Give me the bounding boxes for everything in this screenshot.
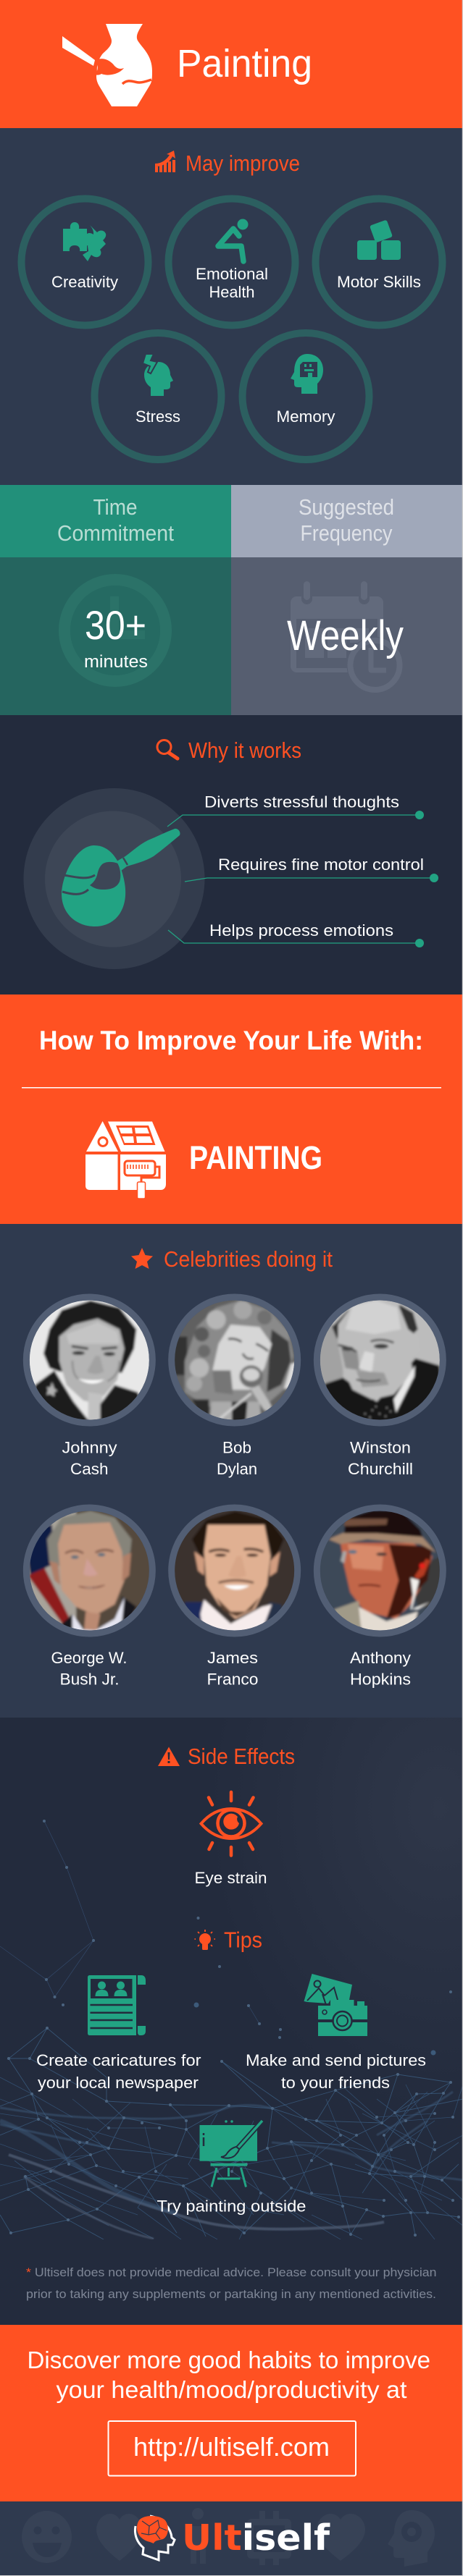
callout: helps process emotions xyxy=(168,921,424,947)
text: discover more: Discover more good habits to improve xyxy=(28,2347,430,2373)
label: Johnny Cash: Cash xyxy=(70,1460,109,1478)
icon: painted vase xyxy=(62,24,152,106)
benefit: stress: Stress xyxy=(135,407,180,426)
heading: suggested frequency xyxy=(299,494,394,546)
illustration: brush painting egg xyxy=(23,788,204,969)
panel: time commitment xyxy=(0,485,231,715)
label: Johnny Cash: Johnny xyxy=(62,1439,117,1456)
benefit: creativity xyxy=(22,198,148,326)
heading: tips xyxy=(194,1927,262,1953)
icon: blocks xyxy=(357,219,401,260)
benefit: stress xyxy=(94,333,222,460)
callout: diverts stressful thoughts xyxy=(167,793,424,827)
label: James Franco: James xyxy=(207,1649,258,1667)
header panel xyxy=(0,0,463,128)
tip: painting outside xyxy=(157,2121,306,2215)
benefit: emotional health: Health xyxy=(209,283,255,301)
icon: puzzle pieces xyxy=(63,222,106,261)
text: discover more xyxy=(28,2347,430,2403)
heading: celebrities doing it: Celebrities doing it xyxy=(164,1246,333,1272)
panel: call to action xyxy=(0,2325,463,2501)
tip: send pictures: Make and send pictures xyxy=(246,2051,426,2069)
callout: requires fine motor control: Requires fine motor control xyxy=(218,856,424,874)
label: George W. Bush Jr.: Bush Jr. xyxy=(59,1671,119,1688)
panel: may improve xyxy=(0,128,463,485)
heading: time commitment: Commitment xyxy=(57,520,174,546)
benefit: memory: Memory xyxy=(277,407,335,426)
panel: celebrities xyxy=(0,1224,463,1718)
label: Anthony Hopkins: Anthony xyxy=(350,1649,411,1667)
value: 30+ minutes xyxy=(84,602,148,672)
icon: camera with picture xyxy=(304,1974,367,2036)
disclaimer: * Ultiself does not provide medical advice. Please consult your physician xyxy=(26,2265,437,2279)
panel: footer xyxy=(0,2501,463,2576)
label: George W. Bush Jr.: George W. xyxy=(51,1649,128,1667)
icon: house with paint roller xyxy=(85,1121,166,1199)
benefit: emotional health xyxy=(168,198,296,326)
icon: newspaper xyxy=(88,1975,146,2035)
portrait: George W. Bush Jr. xyxy=(23,1503,156,1638)
benefit: emotional health: Emotional xyxy=(196,265,268,283)
callout: helps process emotions: Helps process emotions xyxy=(209,921,393,939)
value: 30+ minutes: minutes xyxy=(84,652,148,672)
title: Painting xyxy=(177,42,312,85)
tip: painting outside: Try painting outside xyxy=(157,2197,306,2215)
value: weekly: Weekly xyxy=(287,612,404,659)
benefit: motor skills: Motor Skills xyxy=(337,273,421,291)
label: Bob Dylan: Dylan xyxy=(217,1460,257,1478)
callout: diverts stressful thoughts: Diverts stressful thoughts xyxy=(204,793,399,811)
tip: send pictures: to your friends xyxy=(281,2074,390,2092)
label: Bob Dylan: Bob xyxy=(222,1439,251,1456)
panel: why it works xyxy=(0,715,463,994)
callout: requires fine motor control xyxy=(185,856,438,882)
label: Winston Churchill: Winston xyxy=(350,1439,411,1456)
icon: easel xyxy=(200,2121,262,2187)
tip: caricatures xyxy=(36,1975,201,2092)
heading: side effects: Side Effects xyxy=(188,1744,295,1769)
text: discover more: your health/mood/productivity at xyxy=(57,2376,407,2403)
benefit: motor skills xyxy=(316,198,442,326)
disclaimer xyxy=(26,2265,437,2301)
icon: clock xyxy=(64,580,166,681)
benefit: creativity: Creativity xyxy=(51,273,118,291)
heading: suggested frequency: Frequency xyxy=(300,520,393,546)
panel: how to improve xyxy=(0,994,463,1224)
tip: send pictures xyxy=(246,1974,426,2092)
panel: suggested frequency xyxy=(231,485,463,715)
portrait: Bob Dylan xyxy=(168,1293,301,1428)
button: url: http://ultiself.com xyxy=(133,2432,330,2462)
portrait: James Franco xyxy=(168,1503,301,1638)
portrait: Johnny Cash xyxy=(23,1293,156,1428)
label: Anthony Hopkins xyxy=(350,1649,411,1688)
label: Bob Dylan xyxy=(217,1439,257,1478)
logo: Ultiself xyxy=(135,2516,330,2560)
disclaimer: prior to taking any supplements or partaking in any mentioned activities. xyxy=(26,2287,436,2301)
heading: why it works: Why it works xyxy=(188,738,301,763)
heading: time commitment xyxy=(57,494,174,546)
label: James Franco: Franco xyxy=(207,1671,258,1688)
heading: suggested frequency: Suggested xyxy=(299,494,394,520)
portrait: Anthony Hopkins xyxy=(314,1503,447,1641)
label: George W. Bush Jr. xyxy=(51,1649,128,1688)
value: 30+ minutes: 30+ xyxy=(85,602,146,648)
portrait: Winston Churchill xyxy=(314,1293,447,1428)
label: James Franco xyxy=(207,1649,258,1688)
icon: head with lightning xyxy=(143,354,173,396)
button: url xyxy=(109,2421,356,2475)
tip: caricatures: your local newspaper xyxy=(38,2074,199,2092)
icon: thinking figure xyxy=(218,219,248,261)
benefit: memory xyxy=(242,333,370,460)
icon: brain head logo xyxy=(135,2516,175,2560)
network background xyxy=(0,1821,463,2239)
tip: caricatures: Create caricatures for xyxy=(36,2051,201,2069)
label: Anthony Hopkins: Hopkins xyxy=(350,1671,411,1688)
panel: side effects and tips xyxy=(0,1718,463,2325)
icon: calendar with clock xyxy=(291,581,403,693)
heading: may improve: May improve xyxy=(185,151,300,176)
label: Winston Churchill xyxy=(348,1439,413,1478)
heading: time commitment: Time xyxy=(93,494,138,520)
heading: tips: Tips xyxy=(224,1927,262,1953)
background icons xyxy=(22,2508,435,2567)
label: eye strain: Eye strain xyxy=(194,1869,267,1887)
logo: Ultiself: Ultiself xyxy=(182,2517,330,2559)
heading: painting: PAINTING xyxy=(189,1139,322,1176)
label: Johnny Cash xyxy=(62,1439,117,1478)
label: Winston Churchill: Churchill xyxy=(348,1460,413,1478)
heading: how to improve your life with: How To Improve Your Life With: xyxy=(39,1026,423,1055)
icon: eye with rays xyxy=(201,1792,261,1856)
icon: head with castle xyxy=(291,354,323,394)
